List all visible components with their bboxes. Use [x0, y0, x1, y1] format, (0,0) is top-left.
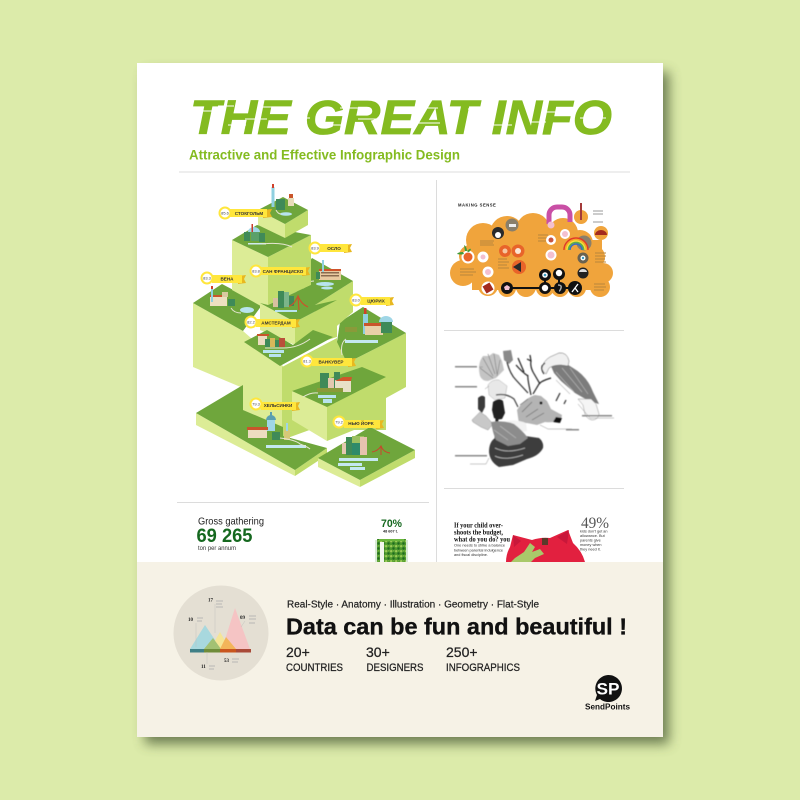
label: Amsterdam: 82.2: [247, 320, 256, 324]
headline: Data can be fun and beautiful !: [286, 614, 627, 640]
fragment: budget article: One needs to strike a balance: [454, 542, 506, 548]
black network: [501, 268, 582, 295]
fragment: budget article: allowance. But: [580, 534, 606, 538]
city building: Zurich: [342, 308, 393, 355]
perch branch with bud: [578, 399, 599, 420]
logo: SendPoints: SendPoints: [585, 702, 631, 712]
chart numbers: [188, 598, 246, 670]
label: Helsinki: 79.3: [252, 402, 261, 406]
thermometer icon: [574, 203, 588, 224]
fragment: budget article: they need it.: [580, 548, 601, 552]
block: Vena: [193, 284, 283, 427]
label: San Francisco: 83.8: [252, 268, 261, 274]
eagle: [542, 353, 599, 404]
plate: New York: [318, 427, 415, 487]
label: Vena: ВЕНА: [220, 276, 234, 282]
block: Oslo: [290, 258, 353, 345]
label: Helsinki: [250, 398, 300, 411]
book cover: [137, 63, 663, 737]
subtitle: Attractive and Effective Infographic Design: [189, 146, 460, 162]
label: Stockholm: СТОКГОЛЬМ: [235, 211, 263, 216]
infographic: making sense: [450, 202, 613, 297]
chart numbers: 53: [224, 659, 230, 664]
label: Zurich: 83.0: [352, 298, 361, 302]
stat: infographics: 250+: [446, 644, 478, 660]
block: Zurich: [337, 307, 406, 430]
label: Helsinki: ХЕЛЬСИНКИ: [264, 403, 292, 408]
title: THE GREAT INFO: [190, 92, 612, 145]
label: Oslo: [310, 242, 352, 254]
label: Vena: 83.3: [203, 276, 212, 280]
stat: infographics: INFOGRAPHICS: [446, 662, 520, 674]
chart numbers: 10: [188, 618, 194, 623]
fragment: budget article: [454, 515, 609, 562]
label: Vancouver: ВАНКУВЕР: [319, 360, 343, 364]
fragment: gross gathering: 48 607 t.: [383, 530, 398, 534]
label: Stockholm: 85.6: [221, 210, 230, 216]
label: Vancouver: [302, 356, 356, 367]
snake coil: [489, 421, 543, 467]
heading: making sense: MAKING SENSE: [458, 202, 496, 208]
label: Amsterdam: [246, 316, 300, 328]
book shadow: [145, 72, 669, 744]
label: New York: [334, 416, 384, 429]
circular triangle chart: [174, 586, 268, 680]
rainbow: [564, 236, 592, 250]
logo: SendPoints: SP: [596, 680, 620, 698]
stat: designers: 30+: [366, 644, 390, 660]
fragment: budget article: If your child over-: [454, 522, 504, 530]
fragment: budget article: 49%: [581, 515, 609, 532]
fragment: gross gathering: [196, 516, 408, 562]
label: Oslo: 83.9: [311, 246, 320, 250]
label: San Francisco: [250, 266, 310, 276]
block: Amsterdam: [243, 330, 337, 440]
cream footer panel: [137, 562, 663, 737]
feather plume: [479, 350, 528, 407]
red cat piggy bank: [506, 530, 585, 562]
label: San Francisco: САН ФРАНЦИСКО: [263, 269, 304, 274]
stat: designers: DESIGNERS: [366, 662, 424, 674]
chart numbers: 11: [201, 665, 206, 670]
label: Amsterdam: АМСТЕРДАМ: [261, 320, 291, 326]
orange cloud: [450, 213, 613, 297]
categories line: Real-Style · Anatomy · Illustration · Geometry · Flat-Style: [287, 600, 540, 610]
stat: designers: [366, 644, 424, 674]
fragment: gross gathering: 70%: [381, 518, 402, 530]
fragment: budget article: what do you do? you: [454, 536, 510, 544]
fragment: gross gathering: Gross gathering: [198, 516, 264, 528]
sense icons: [457, 218, 588, 294]
fragment: budget article: kids don't get an: [580, 530, 608, 534]
fragment: budget article: parents give: [580, 538, 601, 542]
fragment: budget article: between parental indulgence: [454, 548, 504, 552]
label: New York: 79.2: [335, 420, 344, 424]
block: Vancouver: [292, 367, 386, 441]
fragment: budget article: money when: [580, 543, 602, 547]
block: San Francisco: [232, 224, 311, 310]
label: Oslo: ОСЛО: [327, 246, 341, 251]
block: Stockholm: [258, 184, 308, 238]
stat: infographics: [446, 644, 520, 674]
text blocks on cloud: [460, 235, 606, 290]
stat: countries: [286, 644, 343, 674]
plate: San Francisco bay: [260, 285, 337, 350]
green jar: [375, 539, 408, 562]
flower bells: [472, 396, 505, 438]
antlers: [516, 355, 551, 395]
triangles: [190, 608, 251, 652]
annotation lines and small labels: [470, 367, 614, 464]
deer head: [500, 395, 562, 433]
label: New York: НЬЮ ЙОРК: [348, 419, 374, 426]
pink tube: [549, 207, 570, 224]
mouth icon: [594, 226, 608, 240]
plate: Helsinki: [196, 385, 327, 476]
illustration: anatomy animals: [455, 350, 614, 467]
label: Zurich: ЦЮРИХ: [367, 298, 386, 304]
logo: SendPoints: [585, 675, 631, 712]
label: Zurich: [350, 294, 394, 306]
fragment: gross gathering: ton per annum: [198, 546, 236, 552]
label: Vena: [202, 272, 246, 284]
fragment: gross gathering: 69 265: [196, 526, 253, 547]
isometric city chart: [193, 184, 415, 487]
stat: countries: 20+: [286, 644, 310, 660]
chart numbers: 17: [208, 598, 214, 604]
stat: countries: COUNTRIES: [286, 662, 343, 674]
label: Vancouver: 81.3: [303, 358, 312, 364]
chart numbers: 09: [240, 616, 246, 621]
fragment: budget article: and fiscal discipline.: [454, 552, 488, 557]
label: Stockholm: [220, 208, 272, 218]
fragment: budget article: shoots the budget,: [454, 530, 503, 536]
